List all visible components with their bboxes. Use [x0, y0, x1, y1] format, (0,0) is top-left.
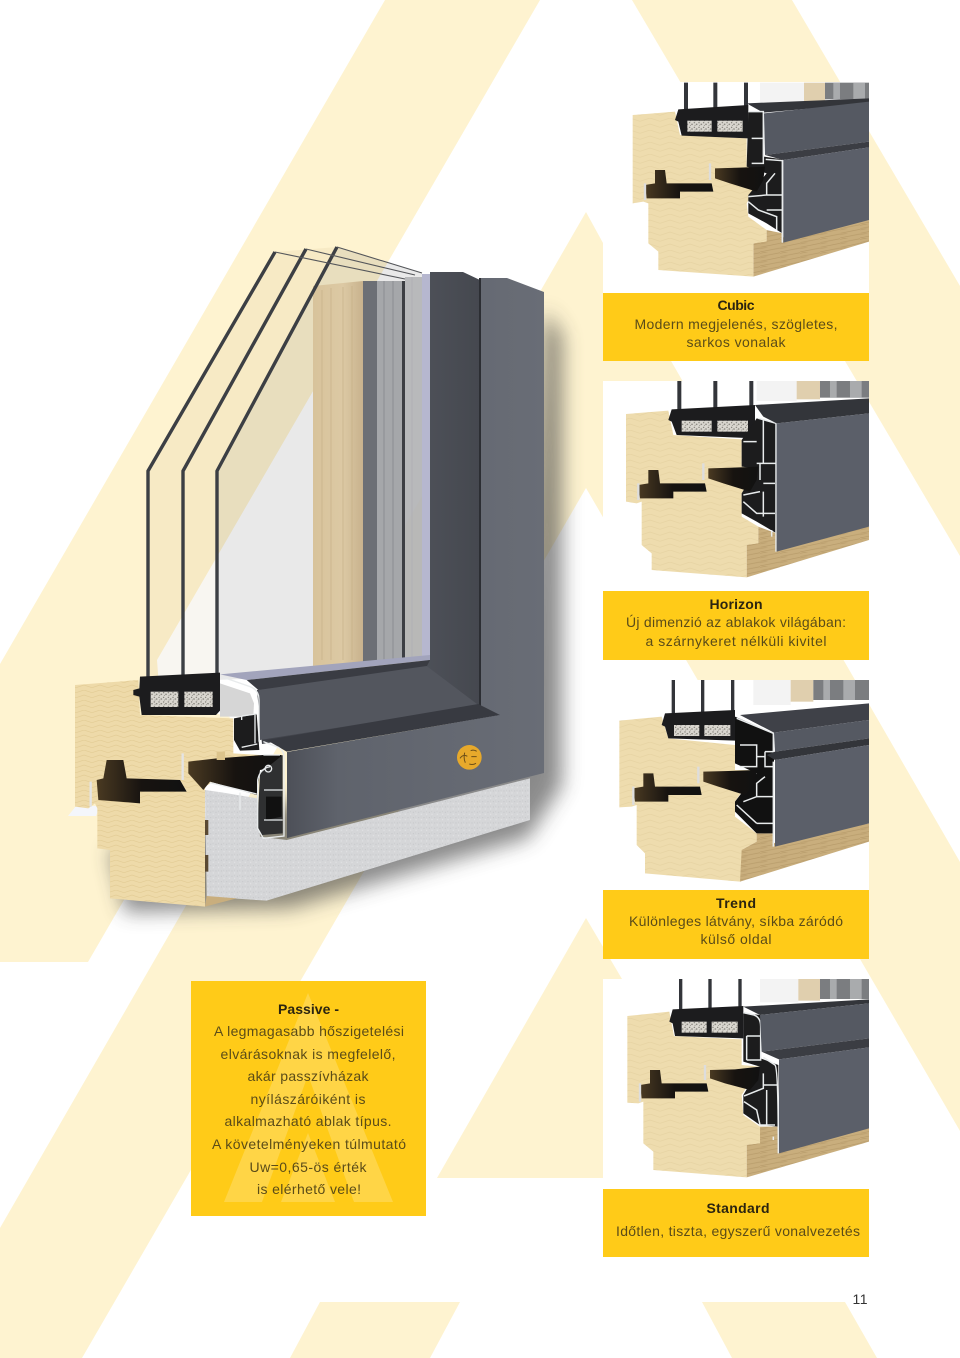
image background: [603, 82, 869, 293]
triple glass panes: [148, 247, 422, 682]
image background: [603, 680, 869, 890]
Passive heading: Passive -: [278, 1001, 339, 1017]
weather seals: [91, 753, 183, 807]
glass spacer: [133, 673, 220, 715]
lower aluminium profile: [210, 742, 284, 838]
Standard profile cross-section: [627, 979, 869, 1177]
glass tint: [216, 247, 422, 680]
insulation block: [205, 778, 530, 901]
panel: Horizon: [603, 381, 869, 660]
Horizon caption box: Horizon: [710, 596, 762, 612]
Passive description: [212, 1023, 406, 1197]
Cubic caption box: sarkos vonalak: [686, 334, 786, 350]
watermark triangle: [224, 993, 393, 1202]
inner frame: [257, 272, 480, 744]
panel: Standard: [603, 979, 869, 1257]
Cubic caption box: Cubic: [718, 297, 755, 313]
Cubic profile cross-section: [633, 83, 869, 277]
wood notches: [205, 820, 208, 872]
image background: [603, 979, 869, 1189]
Passive description: alkalmazható ablak típus.: [224, 1113, 392, 1129]
Trend caption box: Különleges látvány, síkba záródó: [629, 913, 843, 929]
icon: yellow quality badge: [457, 745, 482, 770]
cork insert: [220, 683, 254, 717]
Trend caption box: Trend: [716, 895, 756, 911]
Horizon profile cross-section: [626, 381, 869, 577]
Passive description: nyílászáróiként is: [250, 1091, 366, 1107]
outer frame: [287, 278, 544, 838]
Passive description: A legmagasabb hőszigetelési: [214, 1023, 404, 1039]
Trend caption box: külső oldal: [700, 931, 772, 947]
panel: Trend: [603, 680, 869, 959]
Standard caption box: [603, 1189, 869, 1257]
Standard caption box: Standard: [706, 1200, 770, 1216]
wood underside: [205, 896, 237, 907]
Trend profile cross-section: [619, 680, 869, 882]
white tip below wood: [68, 806, 100, 816]
Horizon caption box: a szárnykeret nélküli kivitel: [646, 633, 826, 649]
Passive description: is elérhető vele!: [257, 1181, 361, 1197]
Trend caption box: [603, 890, 869, 959]
main window illustration: [68, 247, 562, 912]
window cast shadow: [110, 310, 562, 912]
panel: Passive callout: [191, 981, 426, 1216]
Cubic caption box: [603, 293, 869, 361]
panel: Cubic: [603, 82, 869, 361]
Horizon caption box: [603, 591, 869, 660]
Passive description: Uw=0,65-ös érték: [250, 1159, 368, 1175]
interior wood and reveal strips: [313, 274, 431, 666]
upper aluminium profile: [223, 677, 259, 751]
bead and sash faces: [220, 655, 430, 680]
Cubic caption box: Modern megjelenés, szögletes,: [634, 316, 838, 332]
Passive description: A követelményeken túlmutató: [212, 1136, 406, 1152]
Passive description: akár passzívházak: [248, 1068, 370, 1084]
page number: 11: [852, 1291, 868, 1307]
window sill cross-section: [75, 655, 530, 907]
wood cross-section: [75, 680, 260, 907]
Horizon caption box: Új dimenzió az ablakok világában:: [626, 614, 846, 630]
air gaps: [97, 760, 187, 803]
Standard caption box: Időtlen, tiszta, egyszerű vonalvezetés: [616, 1223, 860, 1239]
image background: [603, 381, 869, 591]
Passive description: elvárásoknak is megfelelő,: [220, 1046, 396, 1062]
